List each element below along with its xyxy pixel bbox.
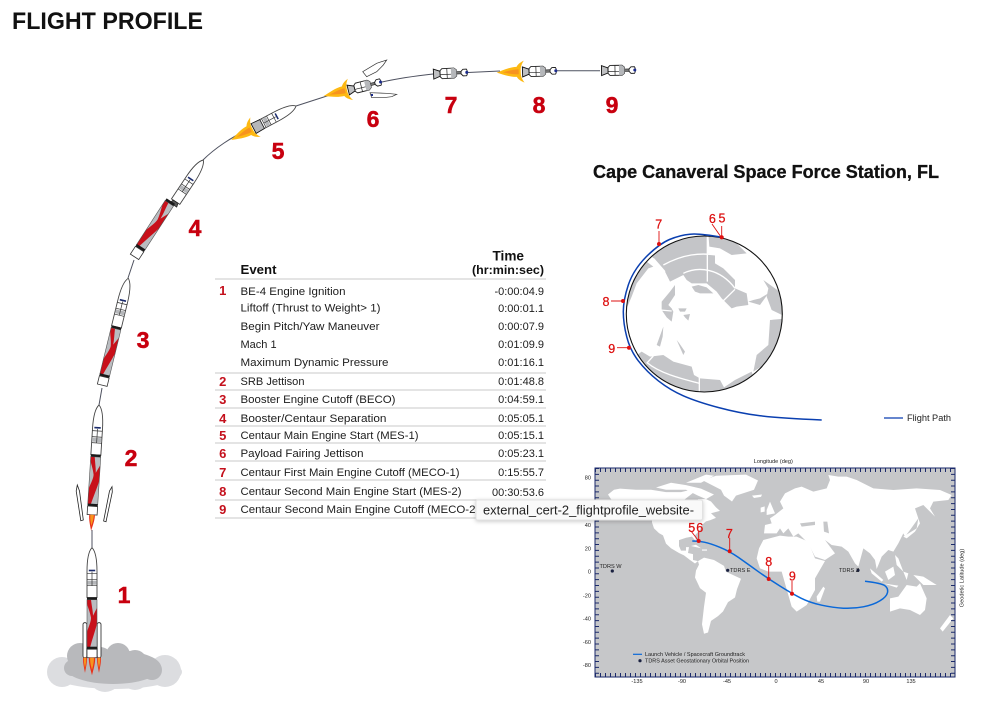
map axis labels (583, 459, 966, 685)
globe markers: 8 (603, 295, 610, 309)
table rows: 7 (219, 465, 226, 480)
map axis labels: 45 (818, 679, 824, 685)
map axis labels: -90 (678, 679, 686, 685)
table rows: 0:01:48.8 (498, 376, 544, 388)
rocket 9 (601, 65, 636, 76)
table rows: 0:00:01.1 (498, 303, 544, 315)
table rows: -0:00:04.9 (494, 286, 544, 298)
stage numbers: 3 (137, 327, 149, 353)
map axis labels: 0 (588, 570, 591, 576)
map axis labels: 90 (863, 679, 869, 685)
table rows: 0:05:23.1 (498, 448, 544, 460)
table header (240, 248, 544, 277)
trajectory line (92, 71, 600, 548)
stage numbers: 9 (606, 92, 618, 118)
table rows: 4 (219, 411, 227, 426)
stage numbers: 7 (445, 92, 457, 118)
stage numbers: 1 (118, 582, 131, 608)
map markers (688, 521, 796, 596)
table rows: 2 (219, 374, 226, 389)
table rows: Centaur Main Engine Start (MES-1) (240, 430, 418, 442)
rocket 6 with fairing jettison (321, 60, 397, 107)
table header: Time (492, 248, 524, 264)
world groundtrack map (583, 459, 966, 685)
map axis labels: -40 (583, 616, 591, 622)
table rows: 0:00:07.9 (498, 321, 544, 333)
map markers: 8 (765, 555, 772, 569)
table rows: Mach 1 (240, 339, 277, 351)
TDRS positions: TDRS W (600, 564, 622, 570)
map axis labels: Geodetic Latitude (deg) (960, 549, 966, 607)
map axis labels: -80 (583, 663, 591, 669)
map axis labels: -135 (631, 679, 643, 685)
table rows: 3 (219, 392, 226, 407)
table rows: 00:30:53.6 (492, 487, 544, 499)
table rows: SRB Jettison (240, 376, 304, 388)
table rows: Liftoff (Thrust to Weight> 1) (240, 302, 380, 314)
flight path legend: Flight Path (907, 413, 951, 423)
table rows: Payload Fairing Jettison (240, 448, 364, 460)
TDRS positions: TDRS Z (839, 568, 860, 574)
map axis labels: 135 (906, 679, 916, 685)
table header: (hr:min:sec) (472, 265, 544, 277)
map legend: TDRS Asset Geostationary Orbital Position (645, 659, 749, 665)
map axis labels: -60 (583, 640, 591, 646)
table rows: BE-4 Engine Ignition (240, 286, 346, 298)
flight path curve (623, 234, 822, 420)
filename tooltip: external_cert-2_flightprofile_website- (483, 502, 694, 518)
table rows: Centaur Second Main Engine Cutoff (MECO-2 (240, 504, 476, 516)
title: FLIGHT PROFILE (12, 8, 203, 35)
table rows: 0:04:59.1 (498, 394, 544, 406)
stage numbers (118, 92, 618, 608)
map markers: 5 (688, 521, 695, 535)
globe heading: Cape Canaveral Space Force Station, FL (593, 162, 939, 182)
rocket 2 with jettisoned boosters (76, 405, 112, 531)
table rows: 5 (219, 428, 226, 443)
globe markers: 5 (719, 212, 726, 226)
table rows: 6 (219, 446, 226, 461)
table rows: Booster/Centaur Separation (240, 413, 386, 425)
globe land masses (627, 236, 782, 392)
table header: Event (240, 262, 277, 277)
map axis labels: 80 (585, 476, 591, 482)
globe markers (603, 212, 726, 356)
rocket 5 with engine flame (226, 101, 299, 150)
stage numbers: 2 (125, 445, 137, 471)
map markers: 9 (789, 570, 796, 584)
rocket 7 (433, 67, 469, 79)
map axis labels: 0 (774, 679, 778, 685)
stage numbers: 4 (189, 215, 202, 241)
map axis labels: 20 (585, 547, 591, 553)
rocket 1 on liftoff (83, 548, 101, 675)
globe view (626, 236, 783, 392)
table rows: 1 (219, 283, 226, 298)
map legend: Launch Vehicle / Spacecraft Groundtrack (645, 652, 745, 658)
globe markers: 9 (608, 342, 615, 356)
table rows: 0:05:05.1 (498, 413, 544, 425)
stage numbers: 6 (367, 106, 379, 132)
table rows: Centaur Second Main Engine Start (MES-2) (240, 486, 462, 498)
table rows: Centaur First Main Engine Cutoff (MECO-1) (240, 467, 460, 479)
stage numbers: 5 (272, 138, 285, 164)
table rows: 0:05:15.1 (498, 430, 544, 442)
flight path legend (884, 413, 951, 423)
exhaust cloud (47, 643, 182, 692)
table rows: 0:01:16.1 (498, 357, 544, 369)
table rows: Begin Pitch/Yaw Maneuver (240, 321, 380, 333)
TDRS positions: TDRS E (730, 568, 751, 574)
continents (608, 475, 953, 634)
table rows: Booster Engine Cutoff (BECO) (240, 394, 396, 406)
globe markers: 7 (655, 218, 662, 232)
rocket 3 (97, 277, 133, 386)
table rows: 0:15:55.7 (498, 467, 544, 479)
map frame and ticks (595, 468, 955, 677)
ground track (692, 541, 888, 608)
map axis labels: -45 (723, 679, 731, 685)
stage numbers: 8 (533, 92, 546, 118)
table rows (219, 283, 544, 517)
rocket 4 separating (130, 157, 207, 260)
table rows: 0:01:09.9 (498, 339, 544, 351)
table rows: Maximum Dynamic Pressure (240, 357, 388, 369)
rocket 8 with engine flame (496, 61, 557, 84)
map legend (633, 652, 749, 665)
map axis labels: Longitude (deg) (754, 459, 793, 465)
table rows: 9 (219, 502, 226, 517)
globe markers: 6 (709, 212, 716, 226)
map markers: 7 (726, 527, 733, 541)
event table (215, 248, 546, 518)
map axis labels: -20 (583, 594, 591, 600)
table rows: 8 (219, 484, 226, 499)
map axis labels: 40 (585, 523, 591, 529)
map markers: 6 (696, 521, 703, 535)
TDRS positions (600, 564, 860, 574)
